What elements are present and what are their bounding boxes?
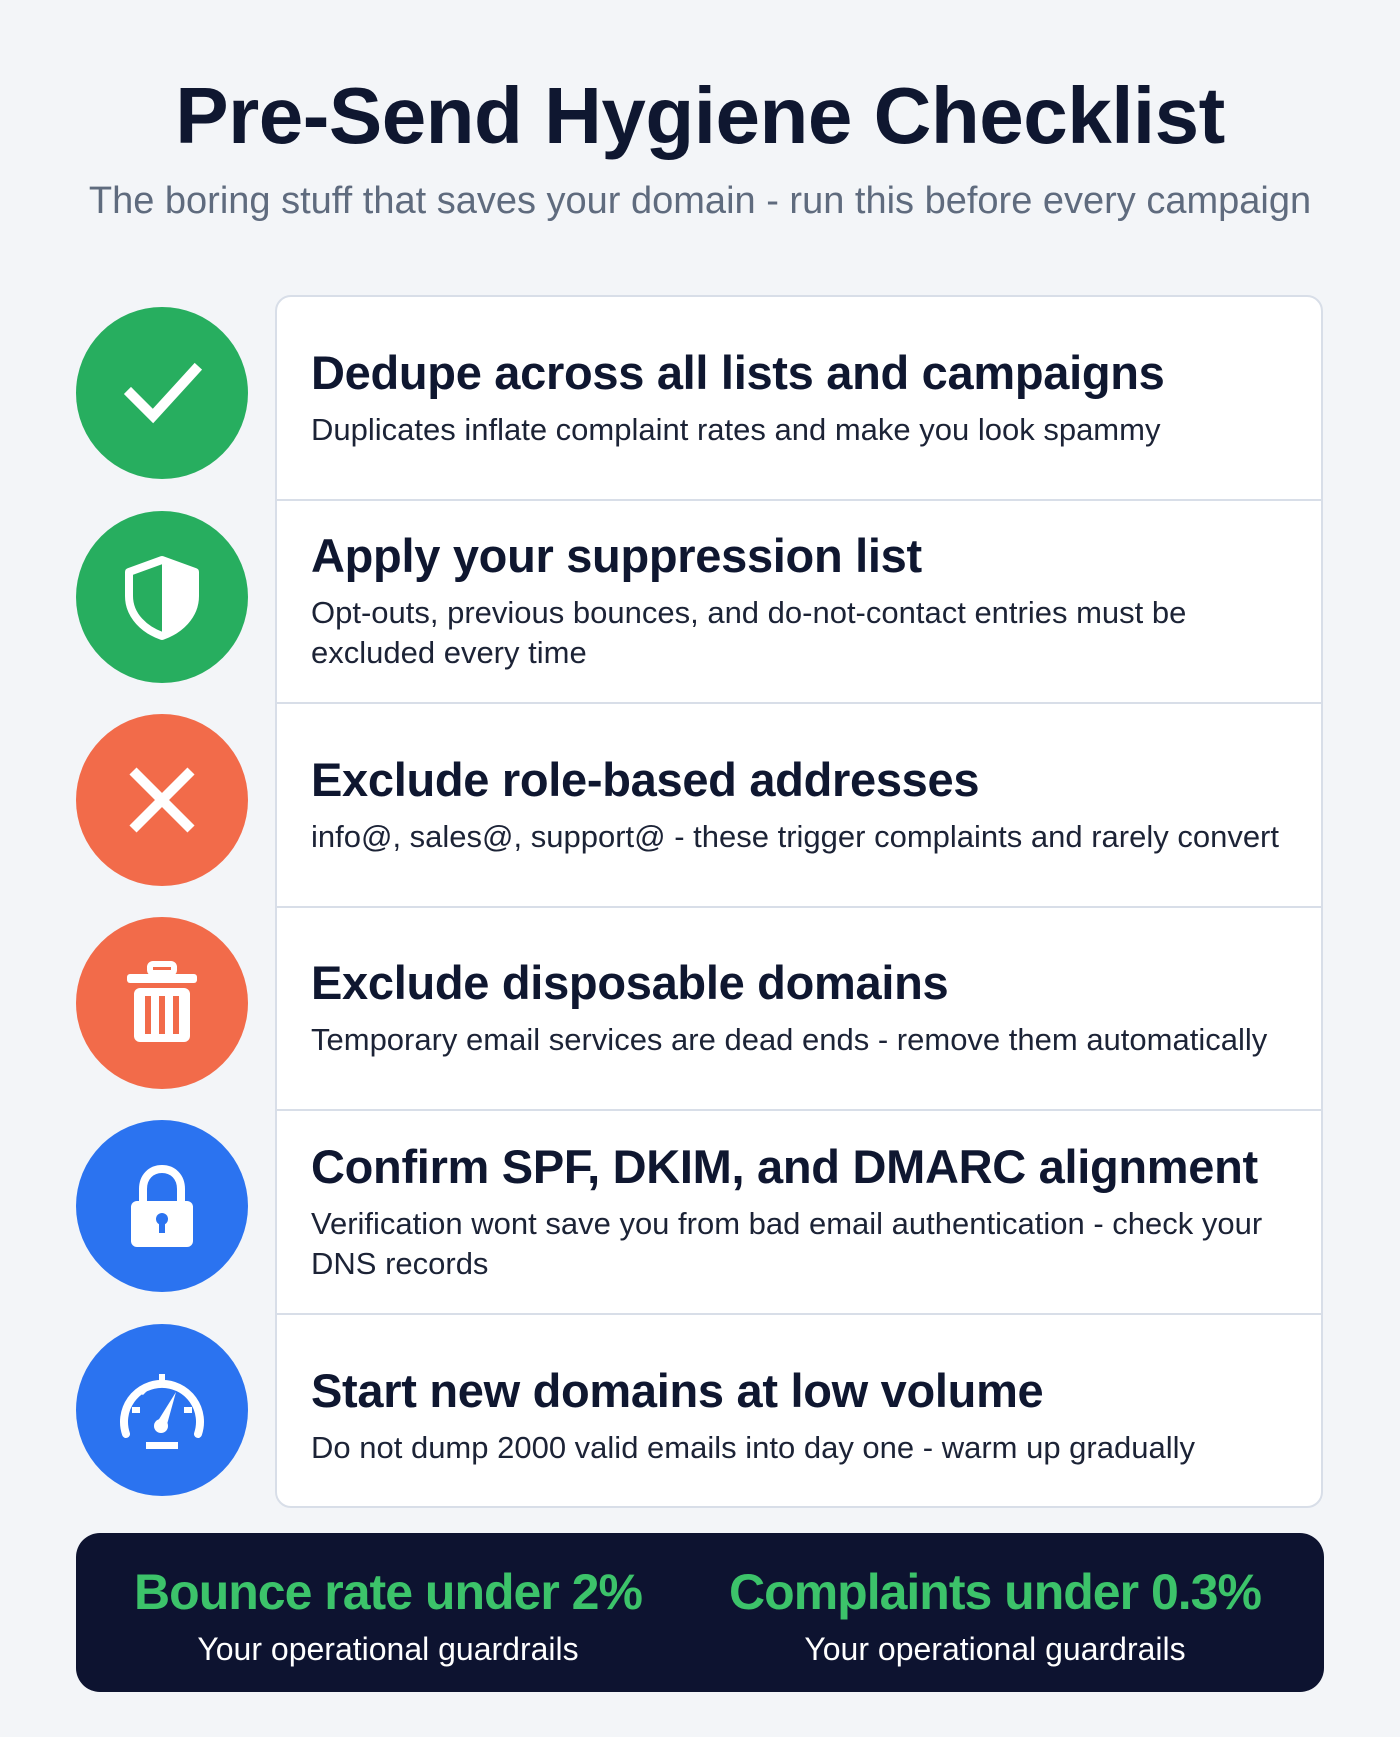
item 3: info@, sales@, support@ - these trigger complaints and rarely convert <box>311 819 1279 854</box>
item 6 <box>311 1364 1195 1465</box>
icon: lock <box>76 1120 248 1292</box>
item 4: Temporary email services are dead ends - remove them automatically <box>311 1022 1267 1057</box>
item 5: Confirm SPF, DKIM, and DMARC alignment <box>311 1140 1258 1193</box>
item 5 <box>277 1111 1321 1314</box>
panel: checklist <box>275 295 1323 1508</box>
item 4: Exclude disposable domains <box>311 956 948 1009</box>
icon: check <box>76 307 248 479</box>
subtitle: The boring stuff that saves your domain - run this before every campaign <box>89 180 1311 222</box>
item 1: Dedupe across all lists and campaigns <box>311 346 1164 399</box>
item 5: DNS records <box>311 1246 488 1281</box>
stat: bounce <box>134 1564 642 1667</box>
item 6: Do not dump 2000 valid emails into day one - warm up gradually <box>311 1430 1195 1465</box>
icon: speedometer <box>76 1324 248 1496</box>
item 2: Apply your suppression list <box>311 529 922 582</box>
stat: bounce: Your operational guardrails <box>197 1631 579 1667</box>
item 2: Opt-outs, previous bounces, and do-not-contact entries must be <box>311 595 1186 630</box>
stat: complaints: Complaints under 0.3% <box>729 1564 1261 1620</box>
item 2 <box>277 500 1321 704</box>
item 5: Verification wont save you from bad email authentication - check your <box>311 1206 1262 1241</box>
stat: complaints: Your operational guardrails <box>804 1631 1186 1667</box>
icon: trash <box>76 917 248 1089</box>
title: Pre-Send Hygiene Checklist <box>175 71 1225 160</box>
panel: guardrails <box>76 1533 1324 1692</box>
item 2: excluded every time <box>311 635 587 670</box>
icon: shield <box>76 511 248 683</box>
item 6: Start new domains at low volume <box>311 1364 1043 1417</box>
icon: x <box>76 714 248 886</box>
item 4 <box>277 908 1321 1111</box>
item 3 <box>277 704 1321 908</box>
item 1: Duplicates inflate complaint rates and make you look spammy <box>311 412 1160 447</box>
item 1 <box>277 297 1321 500</box>
stat: complaints <box>729 1564 1261 1667</box>
item 3: Exclude role-based addresses <box>311 753 979 806</box>
stat: bounce: Bounce rate under 2% <box>134 1564 642 1620</box>
